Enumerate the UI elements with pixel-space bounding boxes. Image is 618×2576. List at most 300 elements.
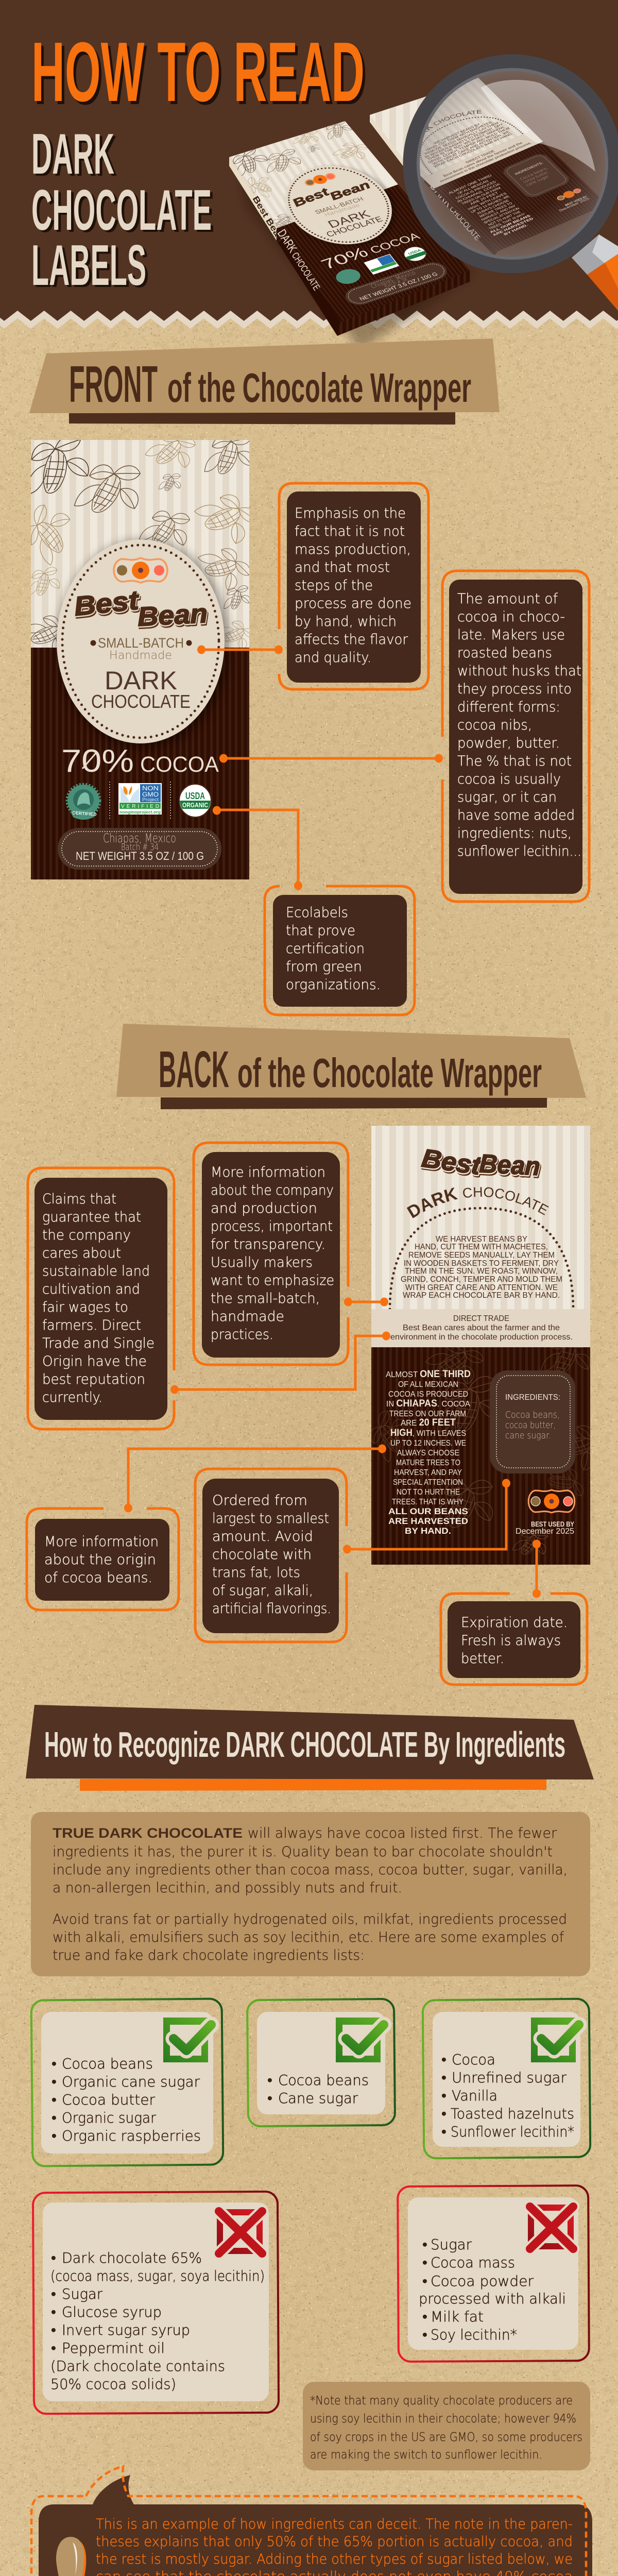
card: fake list one: (cocoa mass, sugar, soya lecithin) (50, 2267, 265, 2284)
callout: amount of cocoa: without husks that (457, 663, 581, 679)
lens contents: magnified back of bar: WE HARVEST BEANS BY (433, 123, 482, 145)
callout: amount of cocoa: ingredients: nuts, (457, 825, 572, 841)
callout: ecolabels (213, 806, 415, 1015)
ingredients box: Cocoa beans, (505, 1410, 560, 1420)
lens contents: magnified back of bar: Cocoa beans, (519, 166, 550, 181)
lens contents: magnified back of bar: WRAP EACH CHOCOLATE BAR BY HAND. (433, 132, 514, 168)
section heading: front of the chocolate wrapper (29, 338, 500, 425)
lens contents: magnified back of bar: HARVEST, AND PAY (480, 204, 517, 222)
callout: direct trade claims: sustainable land (42, 1263, 150, 1279)
callout: direct trade claims: currently. (42, 1389, 102, 1405)
brand name: Best Bean: Bean (478, 1149, 541, 1181)
card: true list three: • (441, 2123, 447, 2140)
card: fake list two: • (422, 2308, 427, 2325)
ingredients box: cocoa butter, (505, 1420, 556, 1431)
ingredients box: INGREDIENTS: (505, 1393, 560, 1402)
card: fake list two: • (422, 2254, 427, 2271)
callout: amount of cocoa: cocoa is usually (457, 771, 561, 787)
mini label oval: Best (289, 185, 333, 209)
panel: intro text: a non-allergen lecithin, and possibly nuts and fruit. (53, 1880, 402, 1896)
mini label lower content: USDA (407, 248, 422, 256)
cocoa pod pattern (31, 440, 249, 648)
cocoa pod pattern, dark section (371, 1347, 590, 1555)
best used by date: BEST USED BY (531, 1520, 575, 1528)
callout: expiration date: Expiration date. (461, 1615, 568, 1631)
card: true list three: Unrefined sugar (452, 2069, 566, 2086)
panel: header background with zigzag edge (0, 0, 618, 335)
callout: amount of cocoa: The % that is not (457, 753, 572, 769)
origin story column: MATURE TREES TO (396, 1459, 460, 1467)
origin story column: SPECIAL ATTENTION (393, 1478, 463, 1487)
lens contents: magnified back of bar: COCOA IS PRODUCED (454, 180, 497, 200)
callout: company and production information: about the company (211, 1182, 334, 1198)
callout: direct trade claims (28, 1168, 390, 1429)
icon: non-gmo project seal (118, 783, 162, 815)
production paragraph: REMOVE SEEDS MANUALLY, LAY THEM (408, 1251, 555, 1260)
card: fake list one: 50% cocoa solids) (50, 2376, 176, 2393)
lens contents: magnified back of bar: BEST USED BY (564, 195, 589, 207)
lens contents: magnified back of bar: ALL OUR BEANS (489, 214, 531, 234)
lens contents: magnified back of bar: DIRECT TRADE (465, 149, 495, 164)
card: fake list two (398, 2185, 589, 2362)
origin and net weight pill: Batch # 34 (121, 842, 159, 853)
curved product name: DARK CHOCOLATE (407, 1187, 549, 1218)
lens contents: magnified back of bar: IN WOODEN BASKETS TO FERMENT, DRY (424, 123, 504, 159)
callout: expiration date: Fresh is always (461, 1633, 561, 1649)
callout: ingredient order: artificial flavorings. (212, 1601, 331, 1617)
lens contents: magnified back of bar: DARK CHOCOLATE (427, 180, 485, 243)
card: fake list two: • (422, 2273, 427, 2290)
callout: ingredient order: trans fat, lots (212, 1565, 300, 1581)
card: true list one: • (52, 2109, 57, 2126)
callout: hand-made emphasis: fact that it is not (295, 523, 405, 539)
origin story column: UP TO 12 INCHES. WE (390, 1439, 466, 1448)
lens contents: magnified back of bar: Best Bean cares about the farmer and the (442, 141, 524, 178)
callout: direct trade claims: fair wages to (42, 1299, 128, 1315)
lens contents: magnified back of bar: cocoa butter, (522, 171, 551, 184)
callout: direct trade claims: Claims that (42, 1191, 116, 1207)
subtitle: Dark chocolate labels: DARK (31, 122, 114, 186)
mini label oval: Handmade (323, 202, 361, 217)
callout: origin of cocoa beans (27, 1445, 386, 1610)
icon: non-gmo project seal: NON (142, 785, 159, 792)
callout: ecolabels: certification (286, 941, 365, 957)
subtitle: Dark chocolate labels (31, 122, 214, 299)
origin story column: OF ALL MEXICAN (398, 1380, 458, 1389)
card: fake list one: • (51, 2285, 56, 2302)
origin story column: ALL OUR BEANS (388, 1507, 468, 1516)
callout: amount of cocoa: The amount of (457, 591, 558, 607)
card: true list one: • (52, 2073, 57, 2090)
callout: hand-made emphasis (197, 483, 428, 689)
callout: hand-made emphasis: and that most (295, 560, 390, 575)
card: true list three: • (441, 2105, 447, 2122)
warning text (96, 2516, 573, 2576)
origin story column: COCOA IS PRODUCED (388, 1390, 468, 1399)
best used by date: December 2025 (516, 1527, 574, 1536)
direct trade band: environment in the chocolate production process. (390, 1333, 573, 1342)
lens contents: magnified back of bar: DARK CHOCOLATE (424, 110, 482, 134)
cocoa percentage: COCOA (140, 752, 219, 777)
origin story column: ALMOST ONE THIRD (386, 1369, 471, 1380)
callout: direct trade claims: guarantee that (42, 1209, 141, 1225)
card: true list one: Organic raspberries (62, 2127, 201, 2144)
callout: expiration date: better. (461, 1651, 504, 1667)
card: fake list one: • (51, 2340, 56, 2357)
callout: ingredient order: Ordered from (212, 1493, 307, 1509)
brand name: Best Bean (420, 1143, 542, 1183)
section heading: back of the chocolate wrapper: BACK (159, 1041, 229, 1098)
brand name: Best Bean: Bean (478, 1149, 541, 1181)
callout: ecolabels: that prove (286, 923, 355, 939)
origin story column: ARE HARVESTED (388, 1517, 468, 1526)
lens contents: magnified back of bar: ARE HARVESTED (492, 217, 535, 237)
lens contents: magnified back of bar: BY HAND. (503, 223, 529, 236)
mini label lower content: 70% (318, 244, 372, 273)
card: true list two: • (267, 2072, 272, 2089)
section heading: how to recognize dark chocolate (26, 1705, 594, 1791)
mini label oval (266, 154, 416, 258)
illustration: front of chocolate bar (229, 121, 470, 343)
icon: usda organic seal (179, 784, 211, 817)
callout: ecolabels: Ecolabels (286, 905, 348, 921)
callout: direct trade claims: Trade and Single (42, 1335, 154, 1351)
card: fake list two: Soy lecithin* (431, 2326, 517, 2343)
callout: amount of cocoa: powder, butter. (457, 735, 560, 751)
origin story column (386, 1369, 471, 1536)
lens contents: magnified back of bar: December 2025 (558, 197, 590, 212)
direct trade band: Best Bean cares about the farmer and the (403, 1324, 560, 1332)
icon: check mark (531, 2018, 579, 2062)
card: fake list two: • (422, 2326, 427, 2343)
card: fake list one: • (51, 2303, 56, 2320)
label oval (57, 539, 230, 749)
cocoa percentage (61, 743, 219, 779)
brand name: Best Bean: Best (73, 586, 142, 622)
production paragraph (401, 1235, 562, 1300)
card: fake list two: Cocoa powder (431, 2273, 534, 2290)
mini label oval: CHOCOLATE (324, 215, 384, 239)
icon: brand logo (114, 558, 167, 583)
warning text: the rest is mostly sugar. Adding the other types of sugar listed below, we (96, 2551, 573, 2567)
production paragraph: IN WOODEN BASKETS TO FERMENT, DRY (404, 1259, 559, 1268)
card: fake list one (33, 2192, 279, 2414)
callout: direct trade claims: Origin have the (42, 1353, 147, 1369)
icon: rainforest alliance seal: CERTIFIED (72, 810, 97, 817)
card: fake list one: • (51, 2321, 56, 2338)
origin and net weight pill (58, 828, 221, 870)
lens contents: magnified back of bar: GRIND, CONCH, TEMPER AND MOLD THEM (427, 127, 510, 164)
panel: speech bubble warning (31, 2466, 592, 2576)
card: true list two: Cocoa beans (278, 2072, 369, 2089)
brand name: Best Bean (73, 585, 209, 634)
panel: intro text (31, 1812, 590, 1976)
label oval: DARK (105, 666, 177, 695)
direct trade band: DIRECT TRADE (453, 1314, 509, 1323)
icon: usda organic seal: USDA (185, 791, 205, 801)
callout: amount of cocoa: roasted beans (457, 645, 552, 661)
origin story column: HARVEST, AND PAY (394, 1468, 462, 1477)
callout: hand-made emphasis: by hand, which (295, 614, 397, 630)
callout: origin of cocoa beans: about the origin (44, 1552, 156, 1568)
card: true list three: Vanilla (452, 2087, 497, 2104)
mini label oval: Bean (327, 179, 373, 202)
lens contents: magnified back of bar: SPECIAL ATTENTION (483, 207, 520, 225)
label oval: CHOCOLATE (91, 691, 191, 712)
magnifier handle (572, 234, 618, 311)
panel: intro text: will always have cocoa listed first. The fewer (248, 1825, 557, 1841)
lens contents: magnified back of bar: UP TO 12 INCHES. WE (470, 195, 510, 214)
card: true list three: • (441, 2051, 447, 2068)
callout: company and production information: handmade (211, 1309, 284, 1325)
callout: amount of cocoa: cocoa nibs, (457, 717, 532, 733)
note: soy lecithin: of soy crops in the US are GMO, so some producers (310, 2431, 582, 2444)
note: soy lecithin: using soy lecithin in their chocolate; however 94% (310, 2412, 576, 2426)
callout: company and production information: the small-batch, (211, 1291, 320, 1307)
label oval: SMALL-BATCH (98, 635, 184, 651)
note: soy lecithin: *Note that many quality chocolate producers are (310, 2394, 573, 2408)
lens contents: magnified back of bar: ALMOST ONE THIRD (448, 174, 493, 195)
icon: non-gmo project seal: GMO (142, 791, 159, 798)
brand name: Best Bean: Best (74, 587, 143, 624)
callout: amount of cocoa: sugar, or it can (457, 789, 557, 805)
card: fake list one: Invert sugar syrup (62, 2321, 190, 2338)
card: fake list one: Dark chocolate 65% (62, 2249, 202, 2266)
lens contents: magnified back of bar: ALWAYS CHOOSE (476, 199, 510, 215)
icon: check mark (336, 2018, 384, 2062)
brand name: Best Bean: Best (421, 1145, 485, 1182)
panel: intro text: Avoid trans fat or partially hydrogenated oils, milkfat, ingredients processed (53, 1911, 567, 1927)
callout: direct trade claims: farmers. Direct (42, 1317, 141, 1333)
panel: flat back wrapper (371, 1126, 590, 1565)
panel: intro text: with alkali, emulsifiers such as soy lecithin, etc. Here are some examples of (53, 1929, 564, 1945)
panel: intro text: include any ingredients other than cocoa mass, cocoa butter, sugar, vanilla, (53, 1862, 568, 1878)
callout: expiration date (441, 1539, 587, 1685)
illustration: front of chocolate bar: DARK CHOCOLATE (274, 227, 324, 293)
callout: hand-made emphasis: and quality. (295, 650, 371, 666)
card: true list three: • (441, 2087, 447, 2104)
title: How to read (31, 25, 367, 122)
card: true list three: Toasted hazelnuts (451, 2105, 574, 2122)
brand name: Best Bean: Bean (137, 599, 208, 632)
panel: flat front wrapper (31, 440, 249, 879)
illustration: back of chocolate bar behind the lens (370, 88, 479, 178)
mini label oval: SMALL-BATCH (313, 195, 365, 215)
callout: amount of cocoa: late. Makers use (457, 627, 565, 643)
card: true list two: Cane sugar (278, 2090, 358, 2107)
lens contents: magnified back of bar (420, 71, 605, 257)
origin story column: NOT TO HURT THE (397, 1488, 460, 1497)
mini label lower content: Chiapas, Mexico (369, 269, 417, 290)
icon: red cross (217, 2209, 263, 2254)
brand name: Best Bean: Best (73, 585, 142, 622)
callout: amount of cocoa: cocoa in choco- (457, 609, 565, 625)
callout: ingredient order: of sugar, alkali, (212, 1583, 313, 1599)
card: true list three: Sunflower lecithin* (451, 2123, 574, 2140)
production paragraph: WITH GREAT CARE AND ATTENTION. WE (405, 1283, 558, 1292)
mini label lower content: NET WEIGHT 3.5 OZ / 100 G (358, 271, 439, 302)
callout: company and production information: process, important (211, 1218, 333, 1234)
callout: origin of cocoa beans: More information (44, 1534, 159, 1550)
lens contents: magnified back of bar: REMOVE SEEDS MANUALLY, LAY THEM (424, 121, 500, 156)
card: true list two (247, 1999, 395, 2126)
brand name: Best Bean: Best (420, 1144, 484, 1181)
origin story column: BY HAND. (405, 1527, 451, 1536)
callout: company and production information: for transparency. (211, 1236, 325, 1252)
callout: ingredient order: amount. Avoid (212, 1529, 313, 1545)
best used by date (516, 1520, 575, 1536)
mini label lower content: COCOA (368, 231, 423, 256)
ingredients box (490, 1370, 575, 1473)
callout: direct trade claims: best reputation (42, 1371, 145, 1387)
icon: check mark (163, 2018, 211, 2062)
origin and net weight pill: Chiapas, Mexico (103, 831, 176, 845)
card: fake list two: Sugar (431, 2236, 472, 2253)
production paragraph: THEM IN THE SUN. WE ROAST, WINNOW, (405, 1267, 558, 1276)
note: soy lecithin: are making the switch to sunflower lecithin. (310, 2448, 542, 2462)
subtitle: Dark chocolate labels: DARK (34, 124, 117, 188)
note: soy lecithin (303, 2382, 590, 2470)
card: fake list one: Glucose syrup (62, 2303, 162, 2320)
lens contents: magnified back of bar: INGREDIENTS: (514, 161, 544, 176)
card: true list one: Cocoa beans (62, 2055, 153, 2072)
lens contents: magnified back of bar: TREES ON OUR FARM (461, 186, 502, 206)
brand name: Best Bean: Bean (137, 599, 208, 633)
production paragraph: HAND, CUT THEM WITH MACHETES, (415, 1243, 548, 1251)
brand name: Best Bean: Bean (479, 1151, 542, 1183)
origin and net weight pill: NET WEIGHT 3.5 OZ / 100 G (76, 850, 204, 862)
lens contents: magnified back of bar: environment in the chocolate production process. (439, 141, 533, 183)
callout: hand-made emphasis: Emphasis on the (295, 505, 406, 521)
brand name: Best Bean: Best (420, 1143, 484, 1180)
icon: brand logo (528, 1490, 575, 1513)
panel: intro text: ingredients it has, the purer it is. Quality bean to bar chocolate shouldn't (53, 1844, 553, 1860)
section heading: front of the chocolate wrapper: FRONT (69, 355, 158, 413)
card: true list one: • (52, 2091, 57, 2108)
panel: intro text: true and fake dark chocolate ingredients lists: (53, 1947, 365, 1963)
card: true list three (423, 1999, 590, 2158)
section heading: back of the chocolate wrapper (116, 1024, 586, 1109)
icon: exclamation mark (52, 2537, 86, 2576)
icon: red cross (528, 2205, 574, 2249)
callout: hand-made emphasis: affects the flavor (295, 632, 408, 648)
origin story column: ALWAYS CHOOSE (397, 1449, 459, 1458)
callout: company and production information: and production (211, 1200, 317, 1216)
card: fake list one: Peppermint oil (62, 2340, 165, 2357)
callout: direct trade claims: cares about (42, 1245, 121, 1261)
lens contents: magnified back of bar: HIGH, WITH LEAVES (467, 192, 508, 211)
callout: amount of cocoa: sunflower lecithin... (457, 843, 581, 859)
origin story column: TREES ON OUR FARM (389, 1410, 466, 1418)
callout: amount of cocoa (219, 571, 589, 902)
lens contents: magnified back of bar: OF ALL MEXICAN (456, 179, 489, 195)
callout: hand-made emphasis: process are done (295, 596, 411, 612)
callout: ecolabels: organizations. (286, 977, 381, 993)
lens contents: magnified back of bar: IN CHIAPAS. COCOA (456, 182, 502, 204)
illustration: magnifying glass (403, 55, 618, 311)
production paragraph: GRIND, CONCH, TEMPER AND MOLD THEM (401, 1275, 562, 1284)
card: true list one: Cocoa butter (62, 2091, 155, 2108)
callout: company and production information: want to emphasize (211, 1273, 334, 1289)
origin story column: ARE 20 FEET (401, 1417, 456, 1428)
icon: non-gmo project seal: VERIFIED (121, 804, 159, 809)
mini label lower content (316, 227, 452, 308)
origin story column: IN CHIAPAS. COCOA (386, 1398, 470, 1409)
brand name: Best Bean: Bean (138, 601, 209, 634)
callout: hand-made emphasis: mass production, (295, 541, 411, 557)
card: true list one: • (52, 2127, 57, 2144)
card: true list three: Cocoa (452, 2051, 495, 2068)
cocoa percentage: 70% (61, 743, 134, 779)
lens contents: magnified back of bar: MATURE TREES TO (478, 201, 513, 218)
subtitle: Dark chocolate labels: CHOCOLATE (34, 180, 214, 244)
panel: intro text: TRUE DARK CHOCOLATE (53, 1825, 243, 1841)
lens contents: magnified back of bar: NOT TO HURT THE (487, 210, 522, 227)
origin story column: TREES. THAT IS WHY (392, 1498, 464, 1506)
callout: company and production information: More information (211, 1164, 325, 1180)
card: true list one (31, 1998, 223, 2166)
callout: direct trade claims: cultivation and (42, 1281, 140, 1297)
callout: company and production information (194, 1143, 388, 1365)
ingredients box: cane sugar. (505, 1430, 551, 1441)
card: fake list one: (Dark chocolate contains (50, 2358, 225, 2375)
production paragraph: WRAP EACH CHOCOLATE BAR BY HAND. (403, 1291, 560, 1300)
mini label oval: DARK (325, 208, 373, 230)
label oval: Handmade (109, 649, 172, 662)
card: fake list two: Cocoa mass (431, 2254, 515, 2271)
illustration: front of chocolate bar: Best Bean (251, 194, 285, 244)
subtitle: Dark chocolate labels: LABELS (31, 233, 146, 297)
icon: rainforest alliance seal (67, 785, 99, 820)
icon: usda organic seal: ORGANIC (182, 801, 208, 809)
callout: amount of cocoa: different forms: (457, 699, 560, 715)
lens contents: magnified back of bar: ARE 20 FEET (469, 191, 500, 206)
lens contents: magnified back of bar: cane sugar. (525, 174, 551, 187)
lens contents: magnified back of bar: TREES. THAT IS WHY (488, 212, 526, 230)
callout: origin of cocoa beans: of cocoa beans. (44, 1570, 152, 1586)
direct trade band (371, 1309, 590, 1347)
production paragraph: WE HARVEST BEANS BY (436, 1235, 527, 1244)
lens contents: magnified back of bar: HAND, CUT THEM WITH MACHETES, (424, 120, 494, 152)
callout: amount of cocoa: have some added (457, 807, 575, 823)
callout: ingredient order: largest to smallest (212, 1511, 329, 1527)
callout: company and production information: Usually makers (211, 1255, 313, 1270)
callout: ingredient order: chocolate with (212, 1547, 312, 1563)
origin story column: HIGH, WITH LEAVES (390, 1428, 466, 1438)
lens contents: magnified back of bar: THEM IN THE SUN. WE ROAST, WINNOW, (426, 125, 506, 161)
card: true list one: Organic cane sugar (62, 2073, 200, 2090)
callout: company and production information: practices. (211, 1327, 273, 1343)
card: true list one: Organic sugar (62, 2109, 156, 2126)
subtitle: Dark chocolate labels: CHOCOLATE (31, 178, 212, 242)
callout: direct trade claims: the company (42, 1227, 131, 1243)
icon: non-gmo project seal: Project (142, 797, 159, 802)
magnifier ring (410, 61, 615, 266)
icon: non-gmo project seal: nongmoproject.org (119, 809, 161, 815)
callout: hand-made emphasis: steps of the (295, 578, 373, 594)
card: true list three: • (441, 2069, 447, 2086)
callout: ecolabels: from green (286, 959, 362, 975)
card: fake list one: • (51, 2249, 56, 2266)
warning text: theses explains that only 50% of the 65% portion is actually cocoa, and (96, 2534, 573, 2550)
lens contents: magnified back of bar: WITH GREAT CARE AND ATTENTION. WE (432, 130, 511, 165)
warning text: This is an example of how ingredients can deceit. The note in the paren- (96, 2516, 573, 2532)
callout: ingredient order (195, 1469, 510, 1642)
card: fake list one: Sugar (62, 2285, 102, 2302)
card: fake list two: processed with alkali (419, 2290, 566, 2307)
card: true list two: • (267, 2090, 272, 2107)
subtitle: Dark chocolate labels: LABELS (34, 235, 149, 299)
